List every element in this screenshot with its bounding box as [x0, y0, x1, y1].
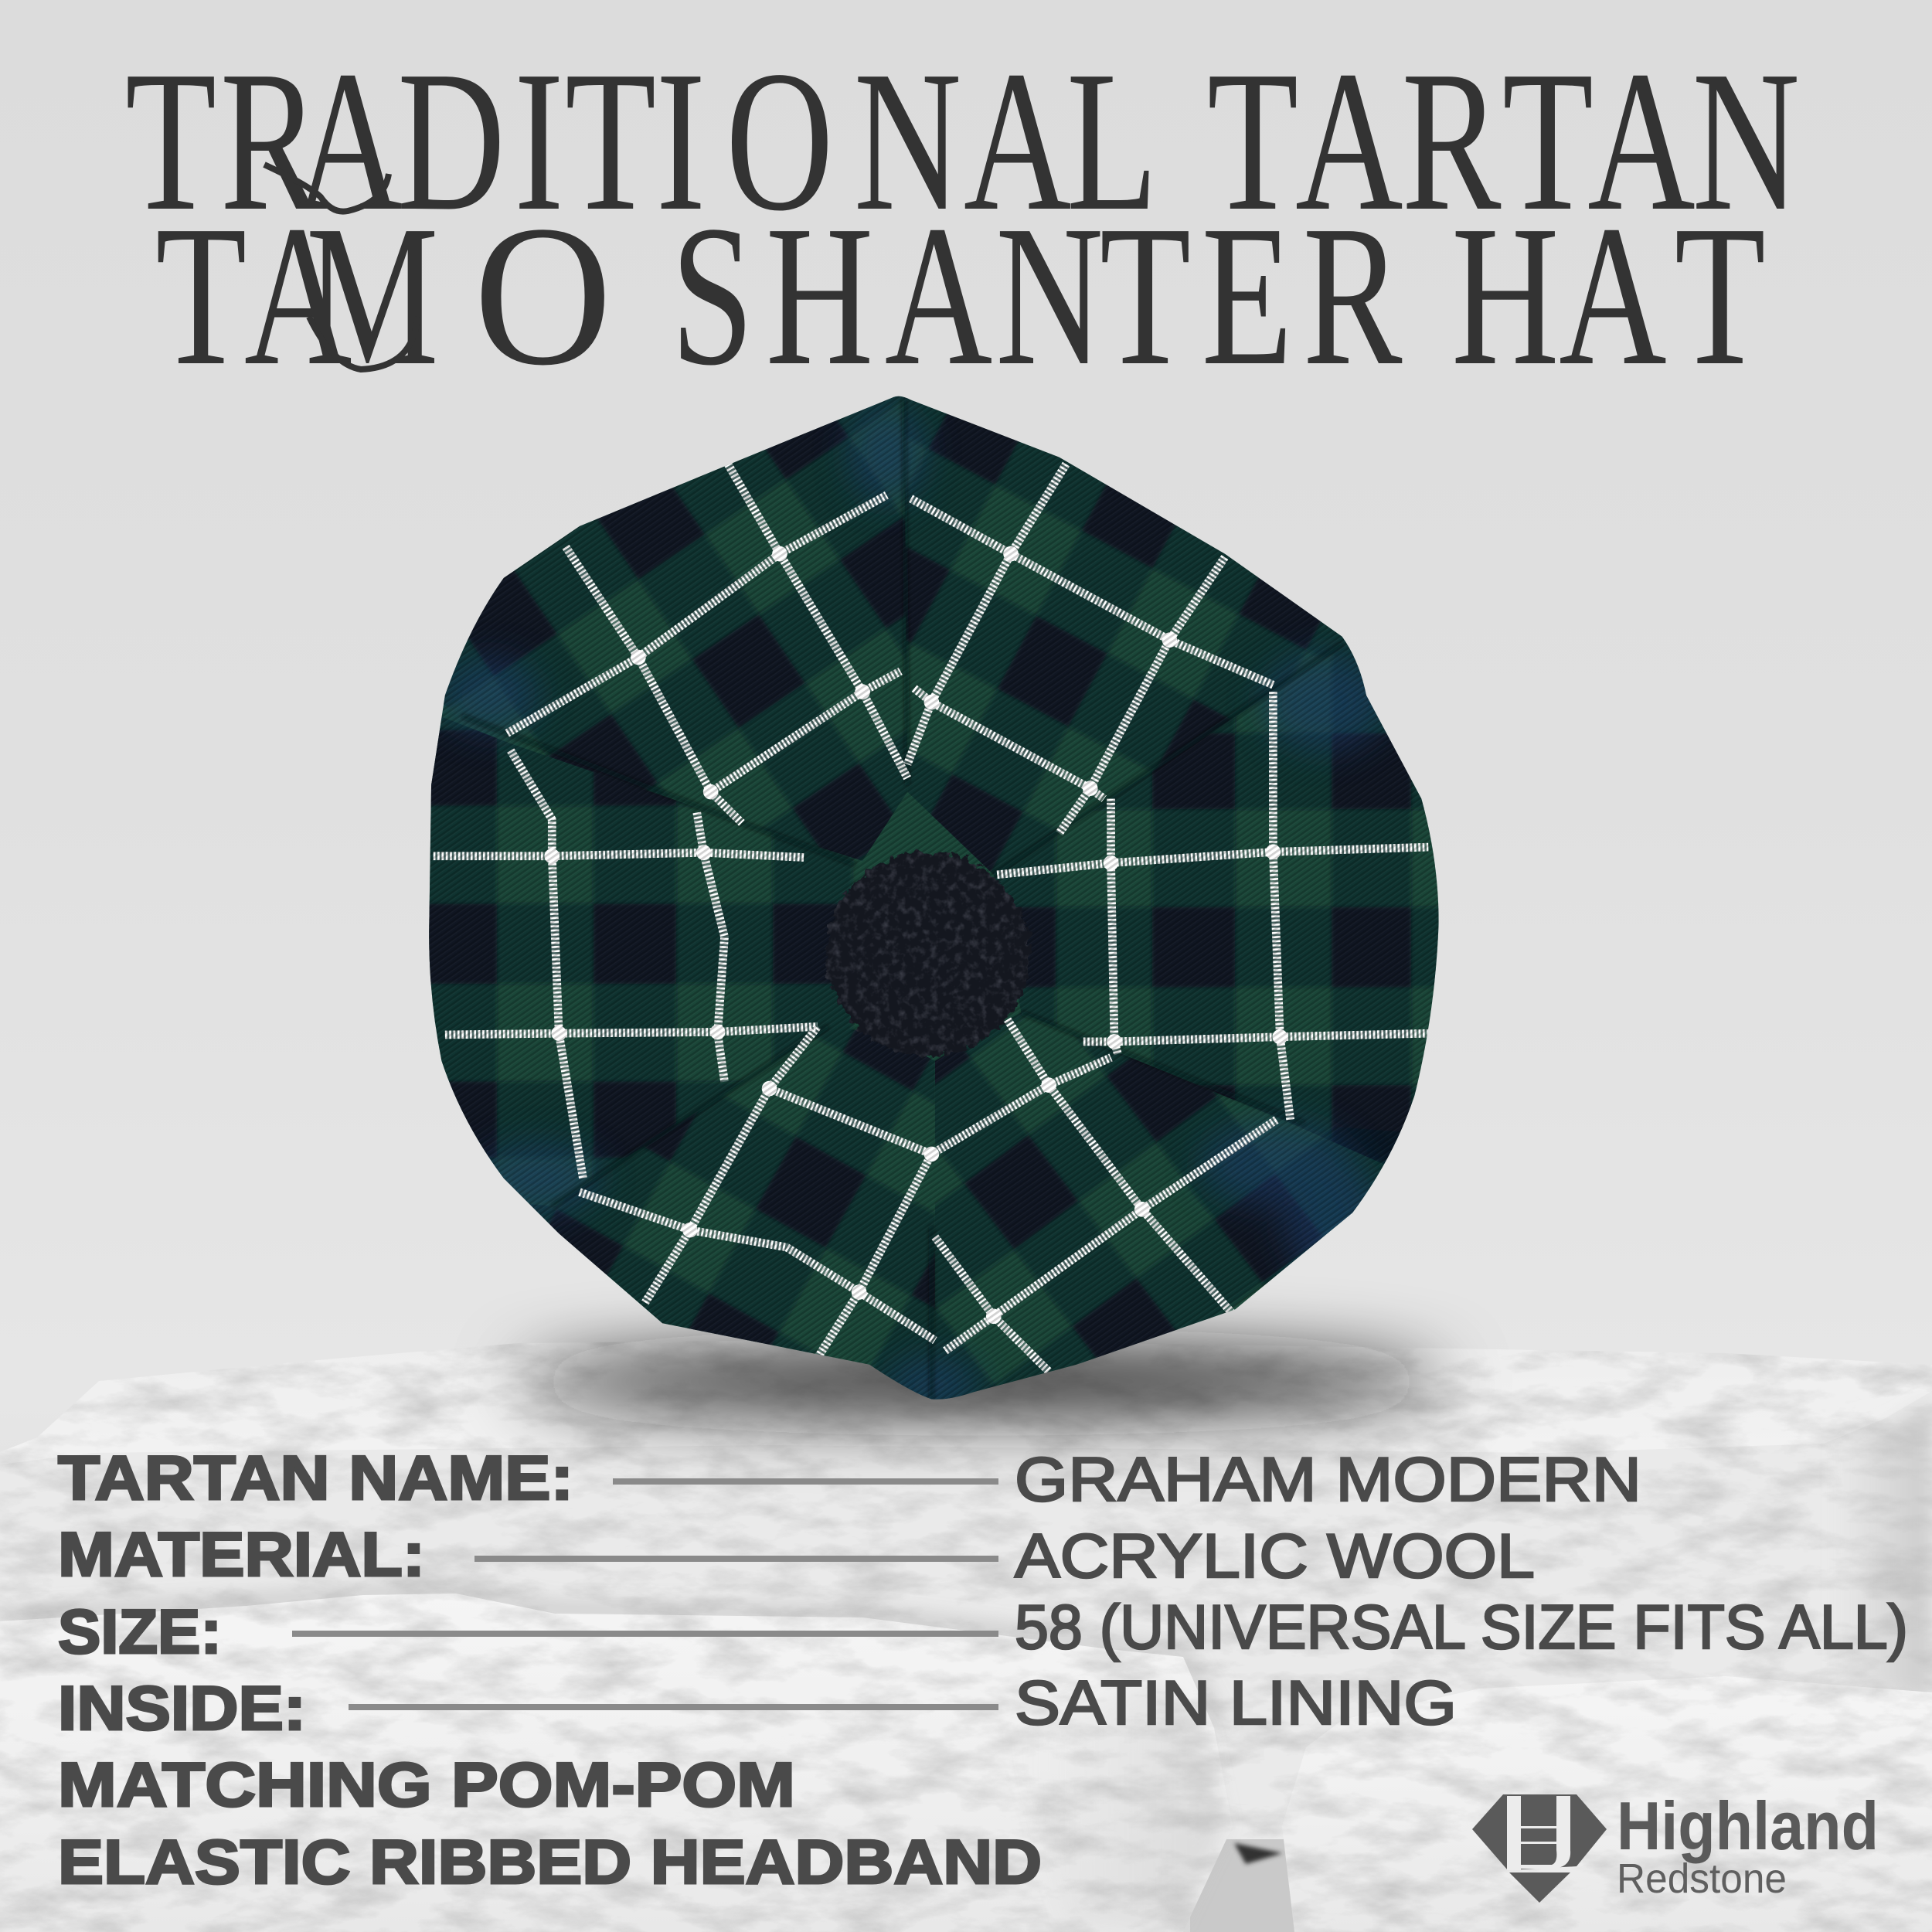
rock: lower left block — [0, 1594, 1233, 1932]
pom-pom — [826, 852, 1030, 1056]
spec labels: MATERIAL: — [58, 1520, 425, 1590]
title line 2 — [155, 183, 1766, 407]
rock: lower right block — [1282, 1676, 1932, 1932]
rock: shadow behind lower left block — [0, 1589, 1221, 1728]
spec values: SATIN LINING — [1015, 1668, 1457, 1738]
spec lines — [292, 1478, 998, 1710]
title line 2: HAT — [1451, 183, 1766, 407]
title line 2: O — [474, 184, 612, 407]
spec labels: ELASTIC RIBBED HEADBAND — [58, 1828, 1042, 1897]
title line 2: TAM — [155, 183, 439, 407]
spec labels: INSIDE: — [58, 1674, 306, 1743]
logo — [1472, 1787, 1879, 1903]
spec labels: MATCHING POM-POM — [58, 1750, 795, 1820]
spec values: ACRYLIC WOOL — [1015, 1522, 1535, 1591]
spec labels: TARTAN NAME: — [58, 1444, 573, 1513]
brand subname: Redstone — [1617, 1855, 1787, 1902]
rock: main slab front face — [0, 1391, 1932, 1932]
seams — [462, 399, 1342, 1399]
hat — [429, 396, 1439, 1400]
panel: top right — [904, 397, 1347, 875]
spec labels: SIZE: — [58, 1597, 222, 1667]
title line 2: SHANTER — [671, 183, 1403, 407]
spec values: 58 (UNIVERSAL SIZE FITS ALL) — [1015, 1593, 1908, 1662]
title line 1: TRADITIONAL TARTAN — [125, 29, 1800, 253]
icon: HJ diamond monogram — [1472, 1794, 1607, 1903]
twill texture — [386, 371, 1463, 1447]
blue edge bands — [441, 406, 1387, 1413]
panel: bottom right — [935, 1012, 1400, 1400]
hat fabric base — [429, 396, 1439, 1400]
rock: main slab top surface — [0, 1339, 1932, 1623]
panel: top left — [444, 396, 907, 861]
spec labels — [58, 1444, 1042, 1897]
panel: bottom left — [530, 1026, 935, 1400]
stripe crossings — [544, 546, 1287, 1324]
spec values: GRAHAM MODERN — [1015, 1445, 1641, 1515]
rock: main slab side shading — [1832, 1403, 1932, 1700]
rock: floor gap between rocks — [1190, 1839, 1306, 1932]
spec values — [1015, 1445, 1908, 1738]
panel: right — [994, 644, 1439, 1164]
title — [125, 29, 1800, 407]
panel: left — [429, 717, 853, 1176]
brand name: Highland — [1617, 1787, 1879, 1864]
hat shadow on rock — [518, 1351, 1445, 1413]
white stripes — [434, 464, 1428, 1372]
rock: lower left block side shading — [1005, 1677, 1225, 1924]
